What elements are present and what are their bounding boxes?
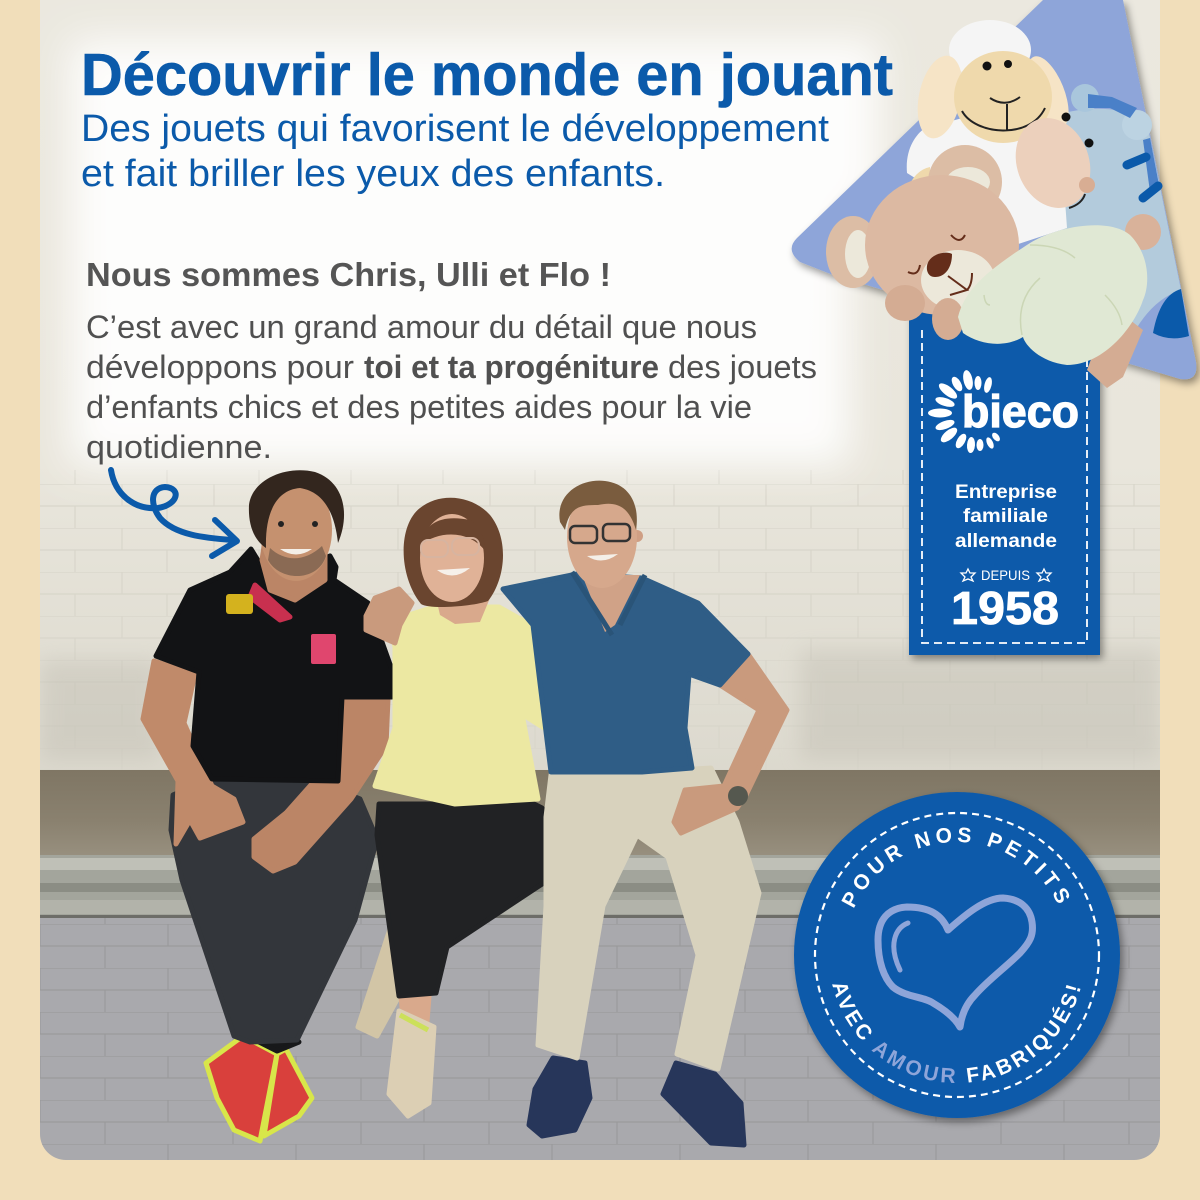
head [559, 481, 643, 588]
white glow behind text [70, 40, 880, 465]
year: 1958 [951, 582, 1059, 634]
intro text: des jouets [668, 349, 817, 385]
intro heading: Nous sommes Chris, Ulli et Flo ! [86, 256, 611, 293]
icon: horse head [1003, 107, 1103, 219]
intro text: quotidienne. [86, 429, 272, 465]
blue ribbon [909, 300, 1100, 655]
round seal [792, 792, 1128, 1126]
shoes [206, 1036, 312, 1141]
icon: green pillow [958, 214, 1161, 388]
intro text [86, 309, 817, 465]
person: Chris [143, 470, 392, 1141]
person: Flo [503, 481, 787, 1145]
subtitle [81, 108, 829, 195]
person: Ulli [358, 498, 559, 1116]
subtitle: et fait briller les yeux des enfants. [81, 153, 665, 195]
company text: Entreprise [955, 482, 1057, 503]
subtitle: Des jouets qui favorisent le développement [81, 108, 829, 150]
company text: allemande [955, 531, 1057, 552]
triangle badge [792, 0, 1196, 379]
icon: sheep [907, 20, 1077, 250]
plush toys [826, 20, 1189, 388]
intro text: d’enfants chics et des petites aides pour la vie [86, 389, 752, 425]
since label: DEPUIS [981, 568, 1030, 583]
company text [955, 482, 1057, 552]
icon: bear [826, 145, 1019, 340]
company text: familiale [963, 506, 1048, 527]
logo: bieco [928, 369, 1079, 453]
seal text top: POUR NOS PETITS [841, 828, 1070, 908]
head [404, 498, 503, 607]
icon: blue horse body [1050, 84, 1189, 340]
icon: heart [878, 898, 1032, 1027]
arrow [111, 470, 237, 556]
since label [961, 568, 1051, 583]
intro text: toi et ta progéniture [364, 349, 659, 385]
seal text bottom: AVEC AMOUR FABRIQUÉS! [832, 984, 1080, 1083]
logo: bieco: bieco [962, 386, 1079, 437]
title: Découvrir le monde en jouant [81, 42, 893, 108]
intro text: C’est avec un grand amour du détail que nous [86, 309, 757, 345]
head [249, 470, 344, 581]
intro text: développons pour [86, 349, 354, 385]
